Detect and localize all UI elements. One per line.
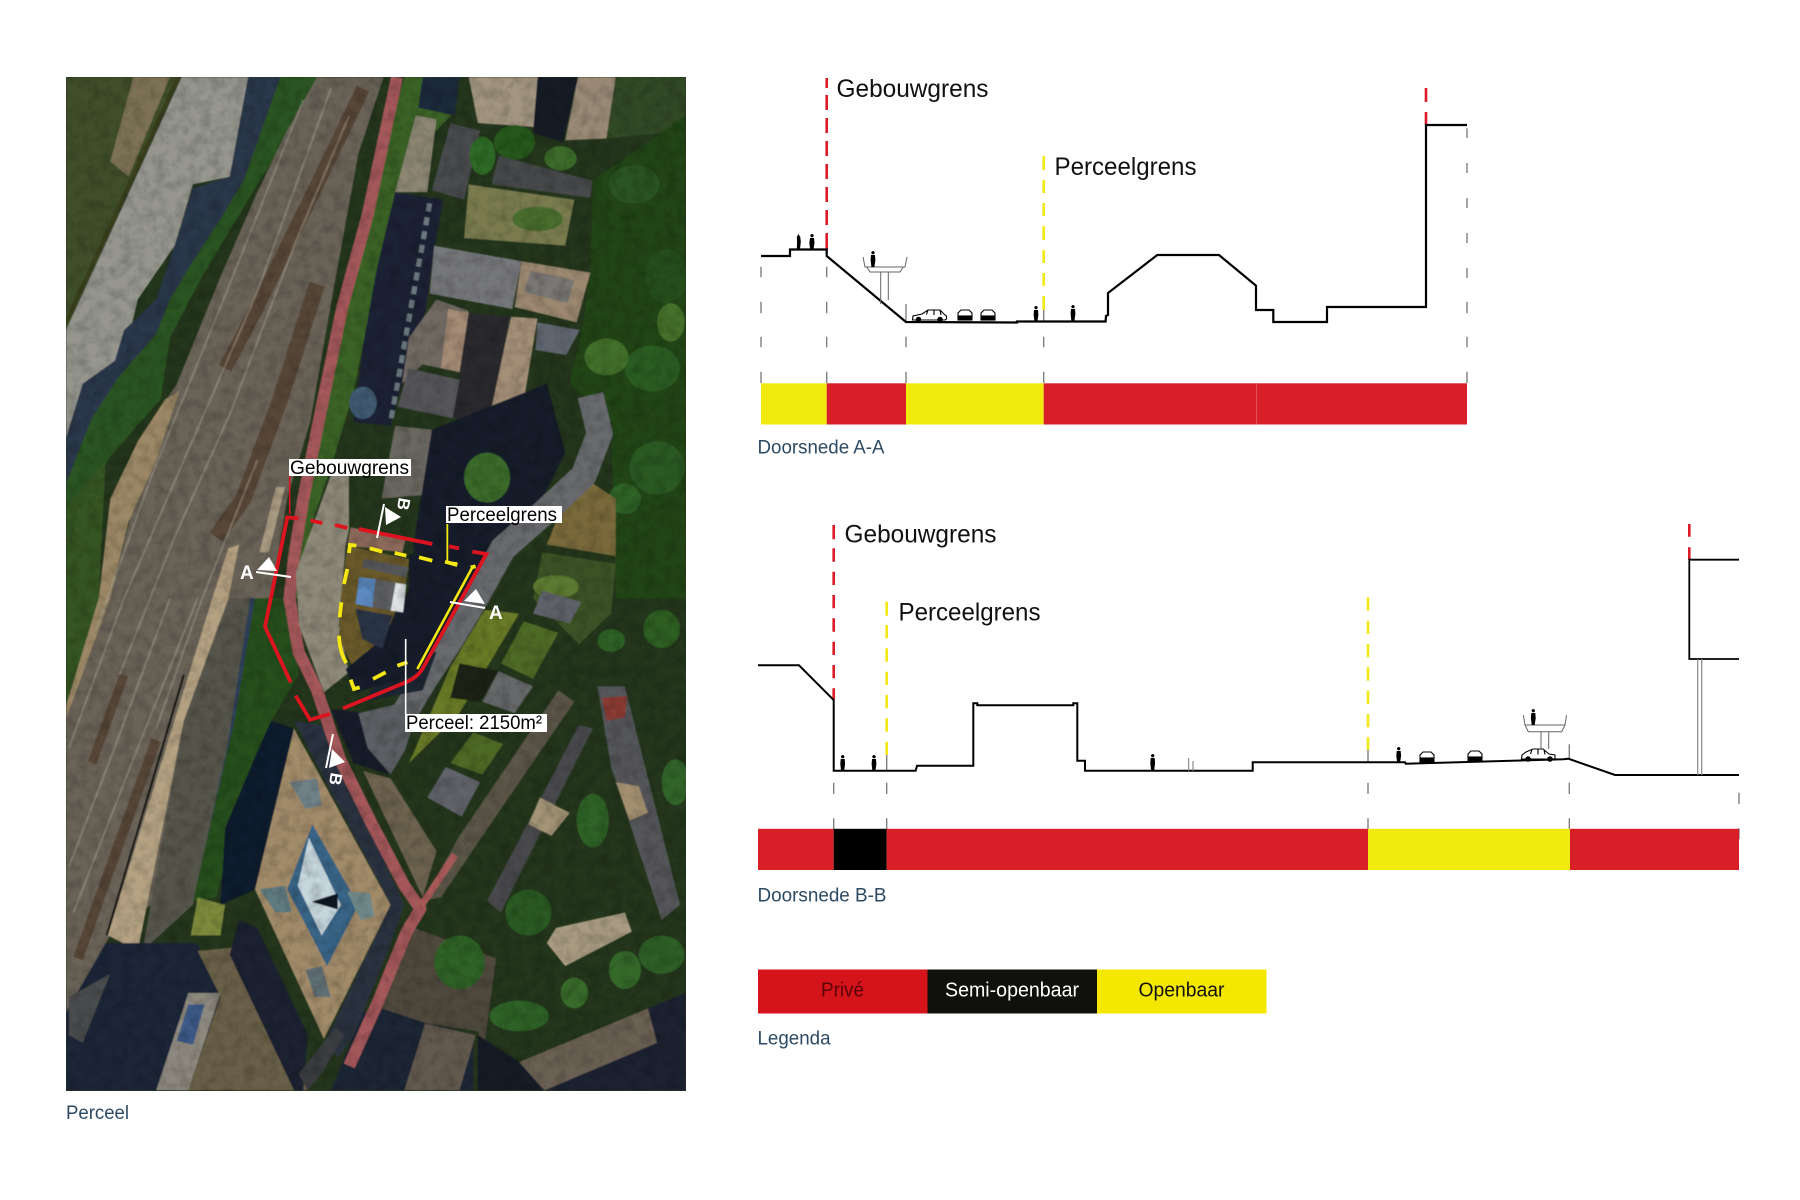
building grey — [372, 579, 396, 611]
trees north — [470, 137, 495, 175]
tan south building — [404, 1024, 476, 1090]
ownership bar A — [761, 383, 1467, 424]
building grey top — [362, 559, 409, 577]
courtyard — [464, 184, 574, 246]
panel: doorsnede B-B — [758, 521, 1739, 906]
right forest — [570, 115, 686, 598]
dark shadow house — [450, 663, 499, 702]
upper tan lot — [469, 77, 538, 127]
legend swatch: Semi-openbaar: Semi-openbaar — [945, 980, 1079, 1002]
site detail layers — [296, 472, 487, 692]
diamond building — [255, 729, 391, 1039]
garden boxes north — [501, 621, 558, 679]
heading: Gebouwgrens A: Gebouwgrens — [836, 75, 988, 103]
bike path branch — [420, 855, 455, 907]
parked cars B — [1420, 749, 1555, 762]
sand strip beside rail — [66, 391, 179, 717]
shadow strip with cars — [391, 204, 430, 422]
lawn strip — [409, 610, 519, 763]
long tan roof — [491, 316, 538, 406]
gebouwgrens red boundary — [265, 517, 486, 720]
solar roof — [515, 261, 590, 322]
dark shadow area — [354, 192, 443, 426]
caption: Legenda: Legenda — [758, 1028, 831, 1050]
grey narrow wing — [402, 299, 469, 384]
bridge B — [1523, 715, 1566, 749]
shadow road south — [230, 920, 308, 1090]
dark behind wing — [331, 709, 391, 775]
upper platform — [260, 487, 285, 552]
dark plaza — [413, 384, 566, 554]
bottom-left dark building — [66, 943, 221, 1090]
people on upper level — [797, 234, 814, 249]
site shadow — [346, 554, 487, 692]
people at street A — [1034, 305, 1075, 321]
ownership bar B — [758, 829, 1739, 870]
columns under tall building — [1698, 659, 1702, 775]
pale track lines — [69, 89, 349, 913]
gabled roof — [397, 368, 460, 418]
panel: perceel satellite map — [66, 77, 689, 1091]
platform — [108, 598, 228, 951]
turrets — [289, 778, 322, 809]
texture overlay — [66, 77, 686, 1091]
east road — [423, 690, 574, 901]
section profile B — [758, 665, 1739, 775]
legend swatch: Openbaar: Openbaar — [1138, 980, 1225, 1002]
section marker A east — [450, 589, 503, 624]
map label: Perceel area: Perceel: 2150m² — [406, 713, 542, 734]
satellite photo layers — [66, 77, 689, 1090]
large grey wing — [358, 698, 423, 775]
section marker B north: B — [393, 496, 414, 512]
people at street B — [840, 747, 1401, 771]
map overlay: boundaries — [265, 474, 486, 720]
plaza by crossing — [363, 771, 437, 897]
section marker A west — [240, 557, 291, 584]
site ground — [339, 546, 409, 672]
caption: Doorsnede B-B: Doorsnede B-B — [758, 886, 886, 906]
large tan roof south-east — [519, 1008, 657, 1090]
grey block — [535, 322, 580, 355]
section marker B south: B — [325, 771, 346, 787]
green wedge near platform — [193, 598, 299, 901]
person on bridge B — [1531, 709, 1536, 725]
grey guide ticks A — [761, 128, 1467, 383]
leader lines — [289, 474, 291, 514]
section marker A east: A — [489, 603, 503, 624]
caption: Doorsnede A-A: Doorsnede A-A — [758, 438, 885, 458]
bike path — [289, 77, 420, 1066]
map label: Perceelgrens: Perceelgrens — [447, 505, 557, 526]
pavement — [296, 472, 349, 692]
shadow beside diamond — [221, 721, 294, 905]
section marker A west: A — [240, 563, 254, 584]
heading: Perceelgrens A: Perceelgrens — [1054, 153, 1196, 181]
rail yard — [66, 77, 384, 1012]
grey house low — [427, 767, 480, 817]
legend swatch: Privé: Privé — [821, 980, 864, 1002]
garden boxes south — [450, 732, 503, 775]
small posts B — [1189, 758, 1193, 771]
green roof lot — [188, 947, 308, 1090]
red gebouwgrens line B — [834, 524, 1689, 700]
south-east ground — [381, 924, 496, 1058]
red gebouwgrens line A — [827, 78, 1426, 250]
south-east trees — [434, 936, 485, 989]
parked cars A — [912, 310, 995, 322]
left low green — [66, 460, 106, 713]
section marker B north — [377, 496, 414, 538]
grey house upper — [533, 591, 581, 623]
round tree — [464, 453, 510, 502]
person on bridge A — [871, 251, 875, 267]
section profile A — [761, 125, 1467, 322]
map label: Gebouwgrens: Gebouwgrens — [290, 458, 409, 479]
lawn garden — [547, 483, 616, 556]
tall building B — [1689, 560, 1739, 659]
legend swatch: Openbaar — [1097, 970, 1266, 1014]
heading: Gebouwgrens B: Gebouwgrens — [844, 521, 996, 549]
parking area — [66, 77, 248, 437]
grey house mid — [482, 671, 533, 713]
round blue roof — [349, 387, 377, 419]
long grey roof — [432, 123, 480, 200]
panel: legend — [758, 970, 1266, 1050]
bike path verge — [289, 77, 460, 598]
building white — [391, 583, 406, 612]
main grey roof — [430, 246, 522, 309]
blocks east middle — [487, 725, 593, 913]
grey hall — [492, 156, 593, 198]
east strip buildings — [597, 686, 680, 920]
road around diamond — [294, 721, 404, 1058]
panel: doorsnede A-A — [758, 75, 1467, 458]
plaza — [347, 527, 406, 552]
tan small terrace — [441, 309, 470, 372]
tan block south-east — [547, 913, 632, 966]
tree shadow — [66, 77, 280, 483]
annex — [381, 426, 432, 499]
road beside shadow — [395, 115, 437, 192]
dark courtyard — [453, 313, 510, 418]
curved building — [404, 395, 600, 713]
rail right of platform — [142, 598, 257, 951]
railway strip blue — [208, 598, 256, 836]
dark south block — [331, 1008, 473, 1090]
building blue — [356, 577, 376, 607]
heading: Perceelgrens B: Perceelgrens — [898, 599, 1040, 627]
section marker B south — [325, 734, 346, 787]
olive line along parking — [66, 77, 178, 322]
caption: Perceel: Perceel — [66, 1103, 129, 1124]
bridge A — [863, 257, 907, 304]
rust tracks — [78, 89, 363, 959]
yellow perceelgrens lines B — [887, 597, 1368, 755]
lens roof — [287, 824, 358, 966]
perceelgrens yellow boundary — [339, 545, 476, 689]
legend swatch: Semi-openbaar — [928, 970, 1097, 1014]
dark south-east — [478, 1035, 542, 1090]
legend swatch: Privé — [758, 970, 928, 1014]
yellow perceelgrens line A — [1042, 156, 1045, 310]
tree band — [66, 77, 322, 537]
solar roof south — [156, 993, 221, 1090]
grey guide ticks B — [834, 744, 1739, 839]
top-left gardens — [66, 77, 179, 330]
